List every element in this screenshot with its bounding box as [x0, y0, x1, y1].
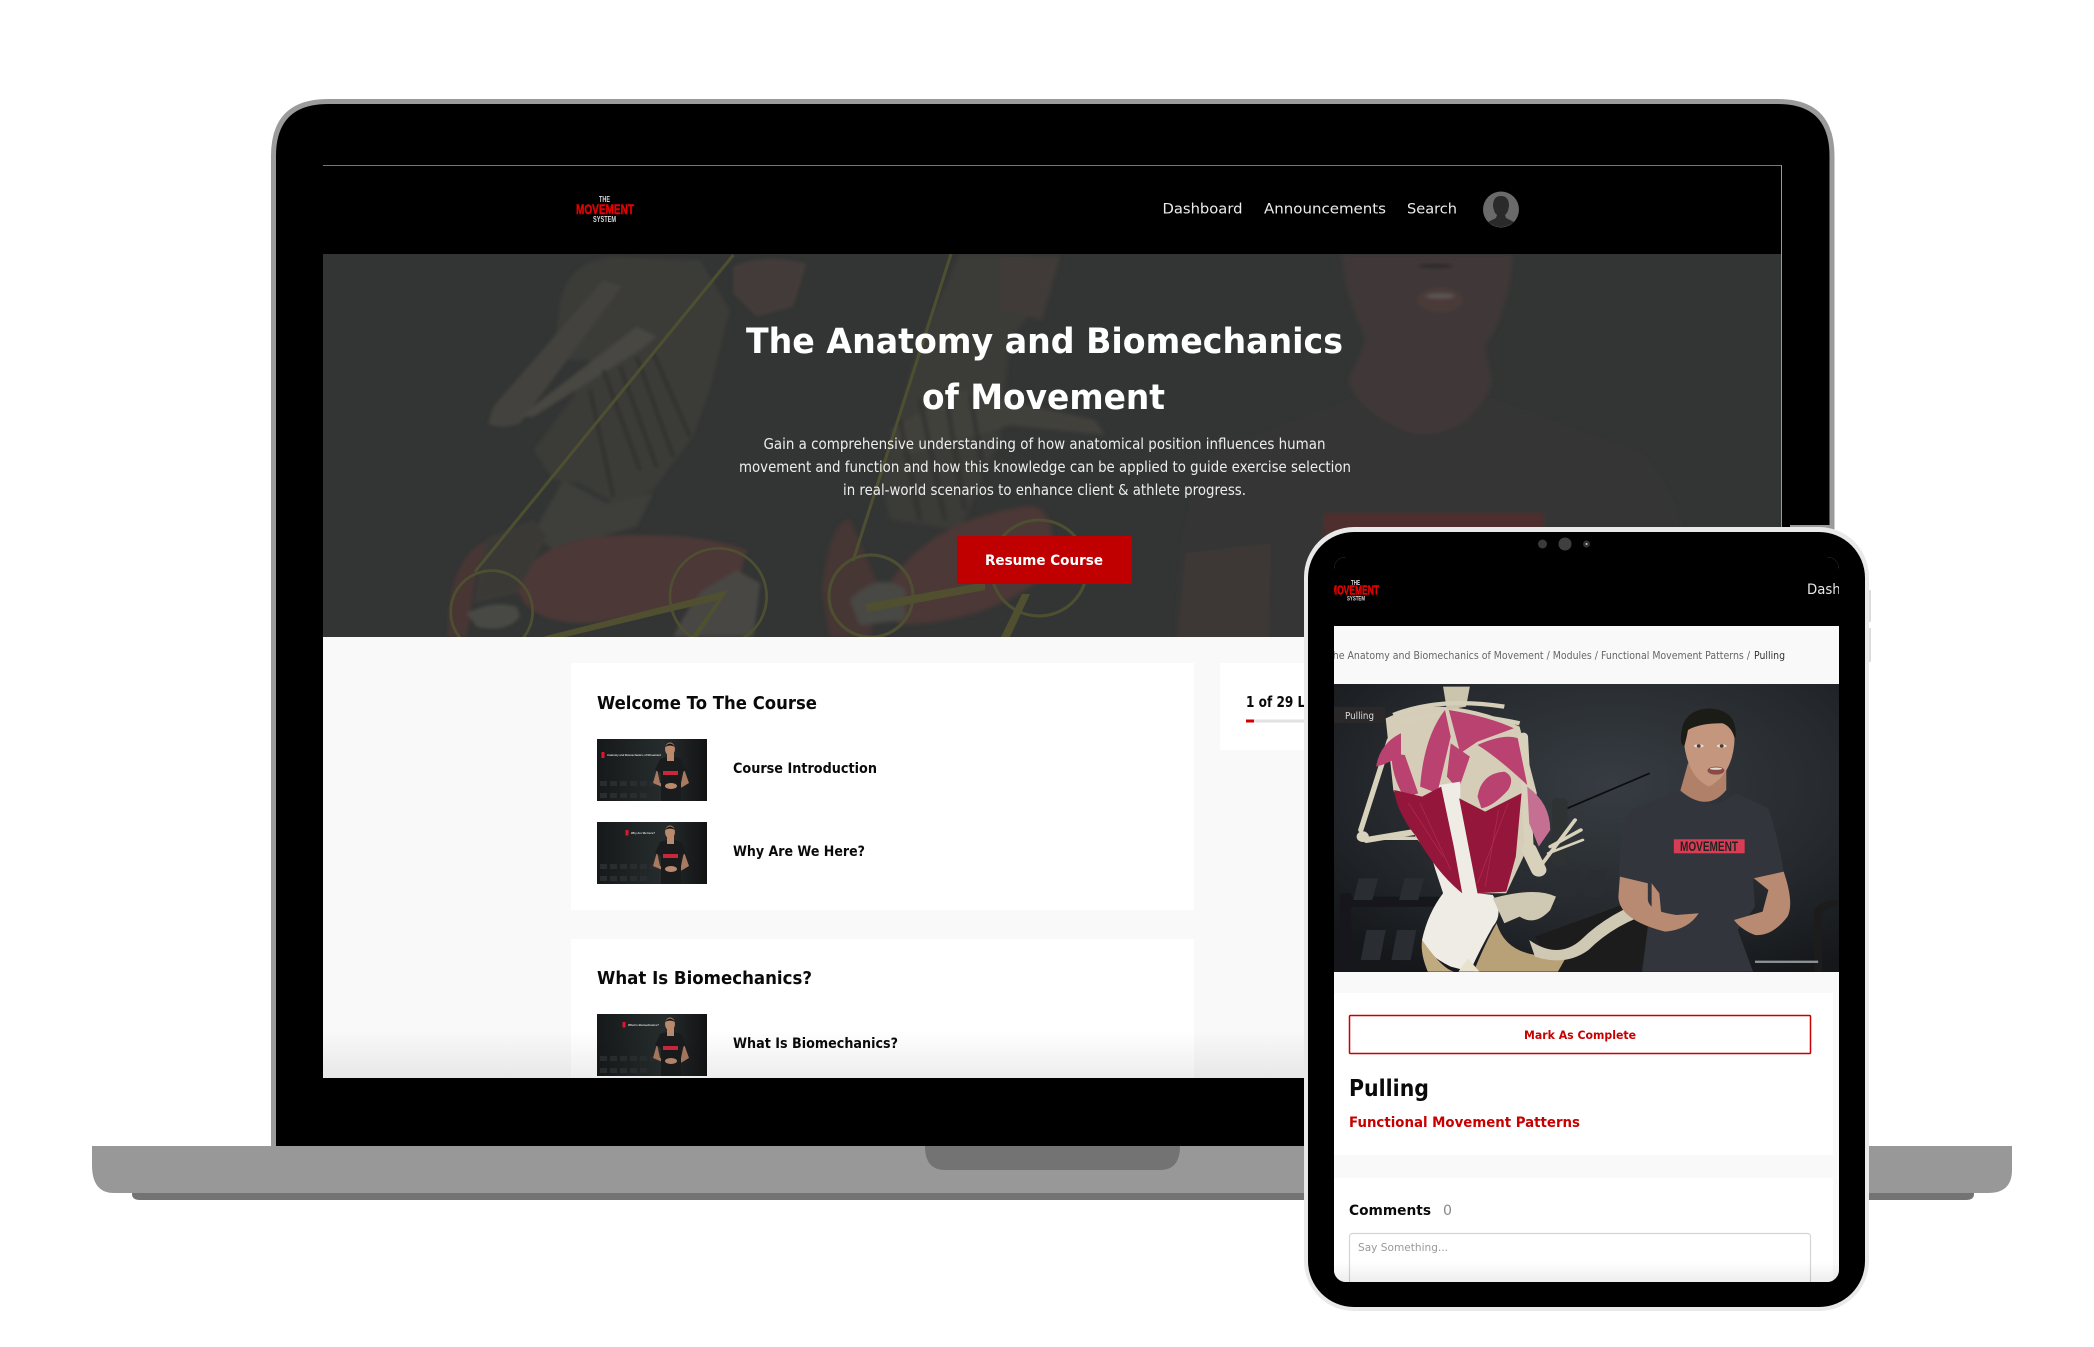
breadcrumb: Pulling	[1754, 650, 1785, 662]
video tag: Pulling	[1345, 711, 1374, 722]
hero section	[323, 254, 1781, 653]
hero photo: presenter	[1178, 256, 1544, 637]
tablet logo: SYSTEM	[1347, 596, 1365, 602]
lesson title: what is biomechanics: What Is Biomechanics?	[733, 1036, 898, 1052]
logo: MOVEMENT	[576, 201, 634, 217]
tablet screen	[1334, 557, 1839, 1282]
laptop lid	[271, 99, 1834, 1146]
laptop	[92, 99, 2012, 1200]
lesson thumbnail: what is biomechanics	[597, 1014, 707, 1076]
hero photo: first skeleton guide lines	[451, 255, 767, 653]
lesson thumbnail: course introduction: Anatomy and Biomechanics of Movement	[607, 753, 661, 757]
hero photo: second skeleton	[822, 254, 1105, 637]
lesson thumbnail: what is biomechanics: What Is Biomechanics?	[628, 1023, 659, 1027]
course description: in real-world scenarios to enhance client & athlete progress.	[843, 481, 1246, 499]
course title: The Anatomy and Biomechanics	[746, 322, 1343, 362]
back muscles	[1376, 710, 1527, 808]
video illustration	[1340, 687, 1839, 973]
nav bar	[323, 165, 1781, 254]
cable	[1567, 773, 1650, 808]
presenter neck and head	[1680, 763, 1726, 802]
spine and ribs	[1393, 703, 1520, 723]
lumbar fascia	[1422, 782, 1499, 972]
course description: movement and function and how this knowledge can be applied to guide exercise selection	[739, 458, 1351, 476]
progress bar	[1246, 720, 1304, 722]
tablet side buttons	[1868, 590, 1871, 662]
course description: Gain a comprehensive understanding of how anatomical position influences human	[764, 435, 1326, 453]
panel: what is biomechanics	[597, 970, 898, 1076]
logo	[576, 196, 634, 222]
comment count: 0	[1443, 1203, 1452, 1219]
lesson thumbnail: why are we here	[597, 822, 707, 884]
nav links: Search	[1407, 202, 1457, 218]
arm bones	[1361, 737, 1583, 870]
ribcage backing	[1386, 707, 1537, 893]
resume course button	[957, 536, 1132, 584]
presenter arms	[1618, 877, 1699, 932]
mark as complete button: Mark As Complete	[1524, 1028, 1636, 1042]
lesson title: course introduction: Course Introduction	[733, 761, 877, 777]
hero photo: first skeleton	[448, 257, 807, 637]
panel: welcome to the course	[597, 696, 876, 884]
lesson title: why are we here: Why Are We Here?	[733, 844, 865, 860]
mark as complete button	[1350, 1016, 1810, 1054]
lesson thumbnail: course introduction	[597, 739, 707, 801]
lats	[1394, 787, 1522, 893]
comments heading: Comments	[1349, 1203, 1431, 1219]
nav links: Announcements	[1264, 202, 1386, 218]
course title	[746, 326, 1342, 410]
lesson thumbnail: why are we here: Why Are We Here?	[631, 831, 655, 835]
nav links	[1164, 202, 1456, 214]
heading: what is biomechanics: What Is Biomechanics?	[597, 969, 812, 989]
tablet logo	[1334, 580, 1379, 600]
video frame	[1334, 684, 1839, 973]
resume course button: Resume Course	[985, 553, 1103, 569]
course title: of Movement	[922, 378, 1165, 418]
logo: SYSTEM	[593, 215, 616, 224]
lesson heading: Pulling	[1349, 1076, 1429, 1102]
laptop screen	[323, 165, 1781, 1078]
presenter shirt	[1619, 790, 1784, 972]
progress label: 1 of 29 Lessons	[1246, 693, 1352, 711]
shirt text: MOVEMENT	[1680, 838, 1738, 854]
breadcrumb: The Anatomy and Biomechanics of Movement / Modules / Functional Movement Patterns /	[1326, 650, 1750, 662]
comment box	[1350, 1234, 1810, 1294]
laptop hinge notch	[925, 1146, 1180, 1170]
tablet body	[1304, 527, 1869, 1311]
panel: course progress	[1246, 696, 1304, 722]
comment box: Say Something...	[1358, 1241, 1448, 1254]
tablet nav bar	[1330, 557, 1879, 626]
shirt logo	[1674, 839, 1745, 853]
panel: comments	[1334, 1178, 1833, 1294]
tablet	[1304, 527, 1879, 1311]
laptop base	[92, 1146, 2012, 1200]
logo: THE	[599, 195, 610, 204]
video tag	[1334, 707, 1385, 723]
course description	[739, 435, 1351, 499]
panel: lesson details	[1334, 993, 1833, 1155]
pelvis and femur	[1493, 892, 1556, 923]
hero photo: second skeleton guide lines	[829, 254, 1087, 637]
heading: welcome: Welcome To The Course	[597, 694, 817, 714]
nav links: Dashboard	[1162, 202, 1242, 218]
avatar	[1483, 192, 1519, 228]
tablet camera dots	[1538, 538, 1590, 550]
bench	[1535, 903, 1673, 973]
tablet logo: MOVEMENT	[1330, 582, 1379, 598]
tablet nav link: Dashboard	[1807, 582, 1879, 598]
tablet logo: THE	[1351, 578, 1360, 587]
module link: Functional Movement Patterns	[1349, 1115, 1580, 1131]
